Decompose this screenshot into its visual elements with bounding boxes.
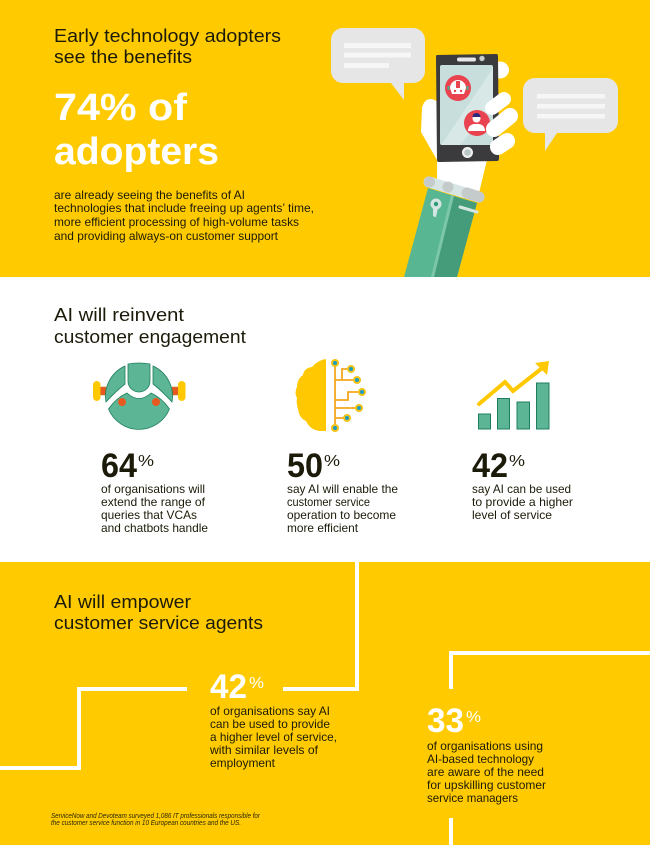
stat: 42% employment: 42 (210, 668, 247, 706)
stat: 42% service: % (509, 453, 525, 470)
text block: benefits description (54, 188, 314, 243)
stat: 64%: of organisations will (101, 482, 205, 496)
heading: early adopters: see the benefits (54, 47, 192, 67)
panel: agents background (0, 562, 650, 845)
person avatar (464, 110, 490, 136)
stat: 64%: queries that VCAs (101, 508, 197, 522)
stat: 33% upskilling: % (466, 709, 481, 726)
stat: 42% service: to provide a higher (472, 495, 573, 509)
phone (436, 54, 499, 162)
fingers (492, 99, 510, 147)
text block: benefits description: and providing always-on customer support (54, 229, 279, 243)
stat: 42% employment: a higher level of service, (210, 730, 337, 744)
icon: digital brain (296, 359, 366, 432)
hand palm (421, 99, 487, 193)
stat: 33% upskilling: AI-based technology (427, 752, 534, 766)
stat: 64% (101, 447, 208, 535)
stat: 33% upskilling: 33 (427, 702, 464, 740)
cuff (424, 176, 479, 197)
stat: 64%: extend the range of (101, 495, 206, 509)
stat: 42% service (472, 447, 573, 522)
panel: engagement background (0, 277, 650, 562)
stat: 42% employment: with similar levels of (209, 743, 319, 757)
heading: early adopters (54, 26, 281, 67)
stat: 33% upskilling: for upskilling customer (427, 778, 546, 792)
text block: benefits description: technologies that include freeing up agents’ time, (54, 201, 314, 215)
stat: 42% service: 42 (472, 447, 508, 485)
footnote: survey source (51, 813, 261, 827)
stat: 50% (287, 447, 398, 535)
heading: empower customer service agents: AI will empower (54, 592, 191, 612)
stat: 42% employment: % (249, 675, 264, 692)
stat: 42% employment (209, 668, 337, 770)
stat: 50%: 50 (287, 447, 323, 485)
robot avatar (445, 75, 471, 101)
stat: 50%: operation to become (287, 508, 396, 522)
stat: 33% upskilling: are aware of the need (427, 765, 544, 779)
big stat: 74% of adopters: 74% of (54, 87, 187, 129)
stat: 42% service: say AI can be used (472, 482, 571, 496)
icon: right speech bubble (523, 78, 618, 151)
panel: top adopters background (0, 0, 650, 277)
stat: 50%: customer service (287, 495, 370, 509)
stat: 33% upskilling: of organisations using (427, 739, 543, 753)
stat: 33% upskilling: service managers (427, 791, 518, 805)
stat: 50%: % (324, 453, 340, 470)
stat: 64%: 64 (101, 447, 137, 485)
top finger (491, 62, 509, 78)
footnote: survey source: the customer service function in 10 European countries and the US. (51, 820, 241, 827)
text block: benefits description: more efficient processing of high-volume tasks (54, 215, 299, 229)
big stat: 74% of adopters: adopters (54, 131, 219, 173)
stat: 42% service: level of service (472, 508, 552, 522)
heading: reinvent customer engagement (54, 305, 246, 347)
stat: 42% employment: can be used to provide (210, 717, 330, 731)
heading: reinvent customer engagement: customer engagement (54, 327, 246, 347)
stat: 33% upskilling (427, 702, 546, 805)
sleeve (404, 188, 477, 277)
illustration: hand holding phone (404, 54, 510, 277)
stat: 64%: % (138, 453, 154, 470)
stat: 50%: more efficient (287, 521, 359, 535)
stat: 42% employment: of organisations say AI (210, 704, 330, 718)
footnote: survey source: ServiceNow and Devoteam surveyed 1,086 IT professionals responsible for (51, 813, 261, 820)
icon: growth chart (478, 361, 549, 429)
stat: 64%: and chatbots handle (101, 521, 208, 535)
stat: 50%: say AI will enable the (287, 482, 398, 496)
heading: empower customer service agents: customer service agents (54, 613, 263, 633)
heading: early adopters: Early technology adopters (54, 26, 281, 46)
heading: reinvent customer engagement: AI will reinvent (54, 305, 184, 325)
connector lines (0, 562, 650, 845)
icon: left speech bubble (331, 28, 425, 100)
text block: benefits description: are already seeing the benefits of AI (54, 188, 245, 202)
stat: 42% employment: employment (210, 756, 276, 770)
big stat: 74% of adopters (54, 87, 219, 173)
heading: empower customer service agents (54, 592, 263, 633)
icon: robot head (93, 363, 186, 429)
